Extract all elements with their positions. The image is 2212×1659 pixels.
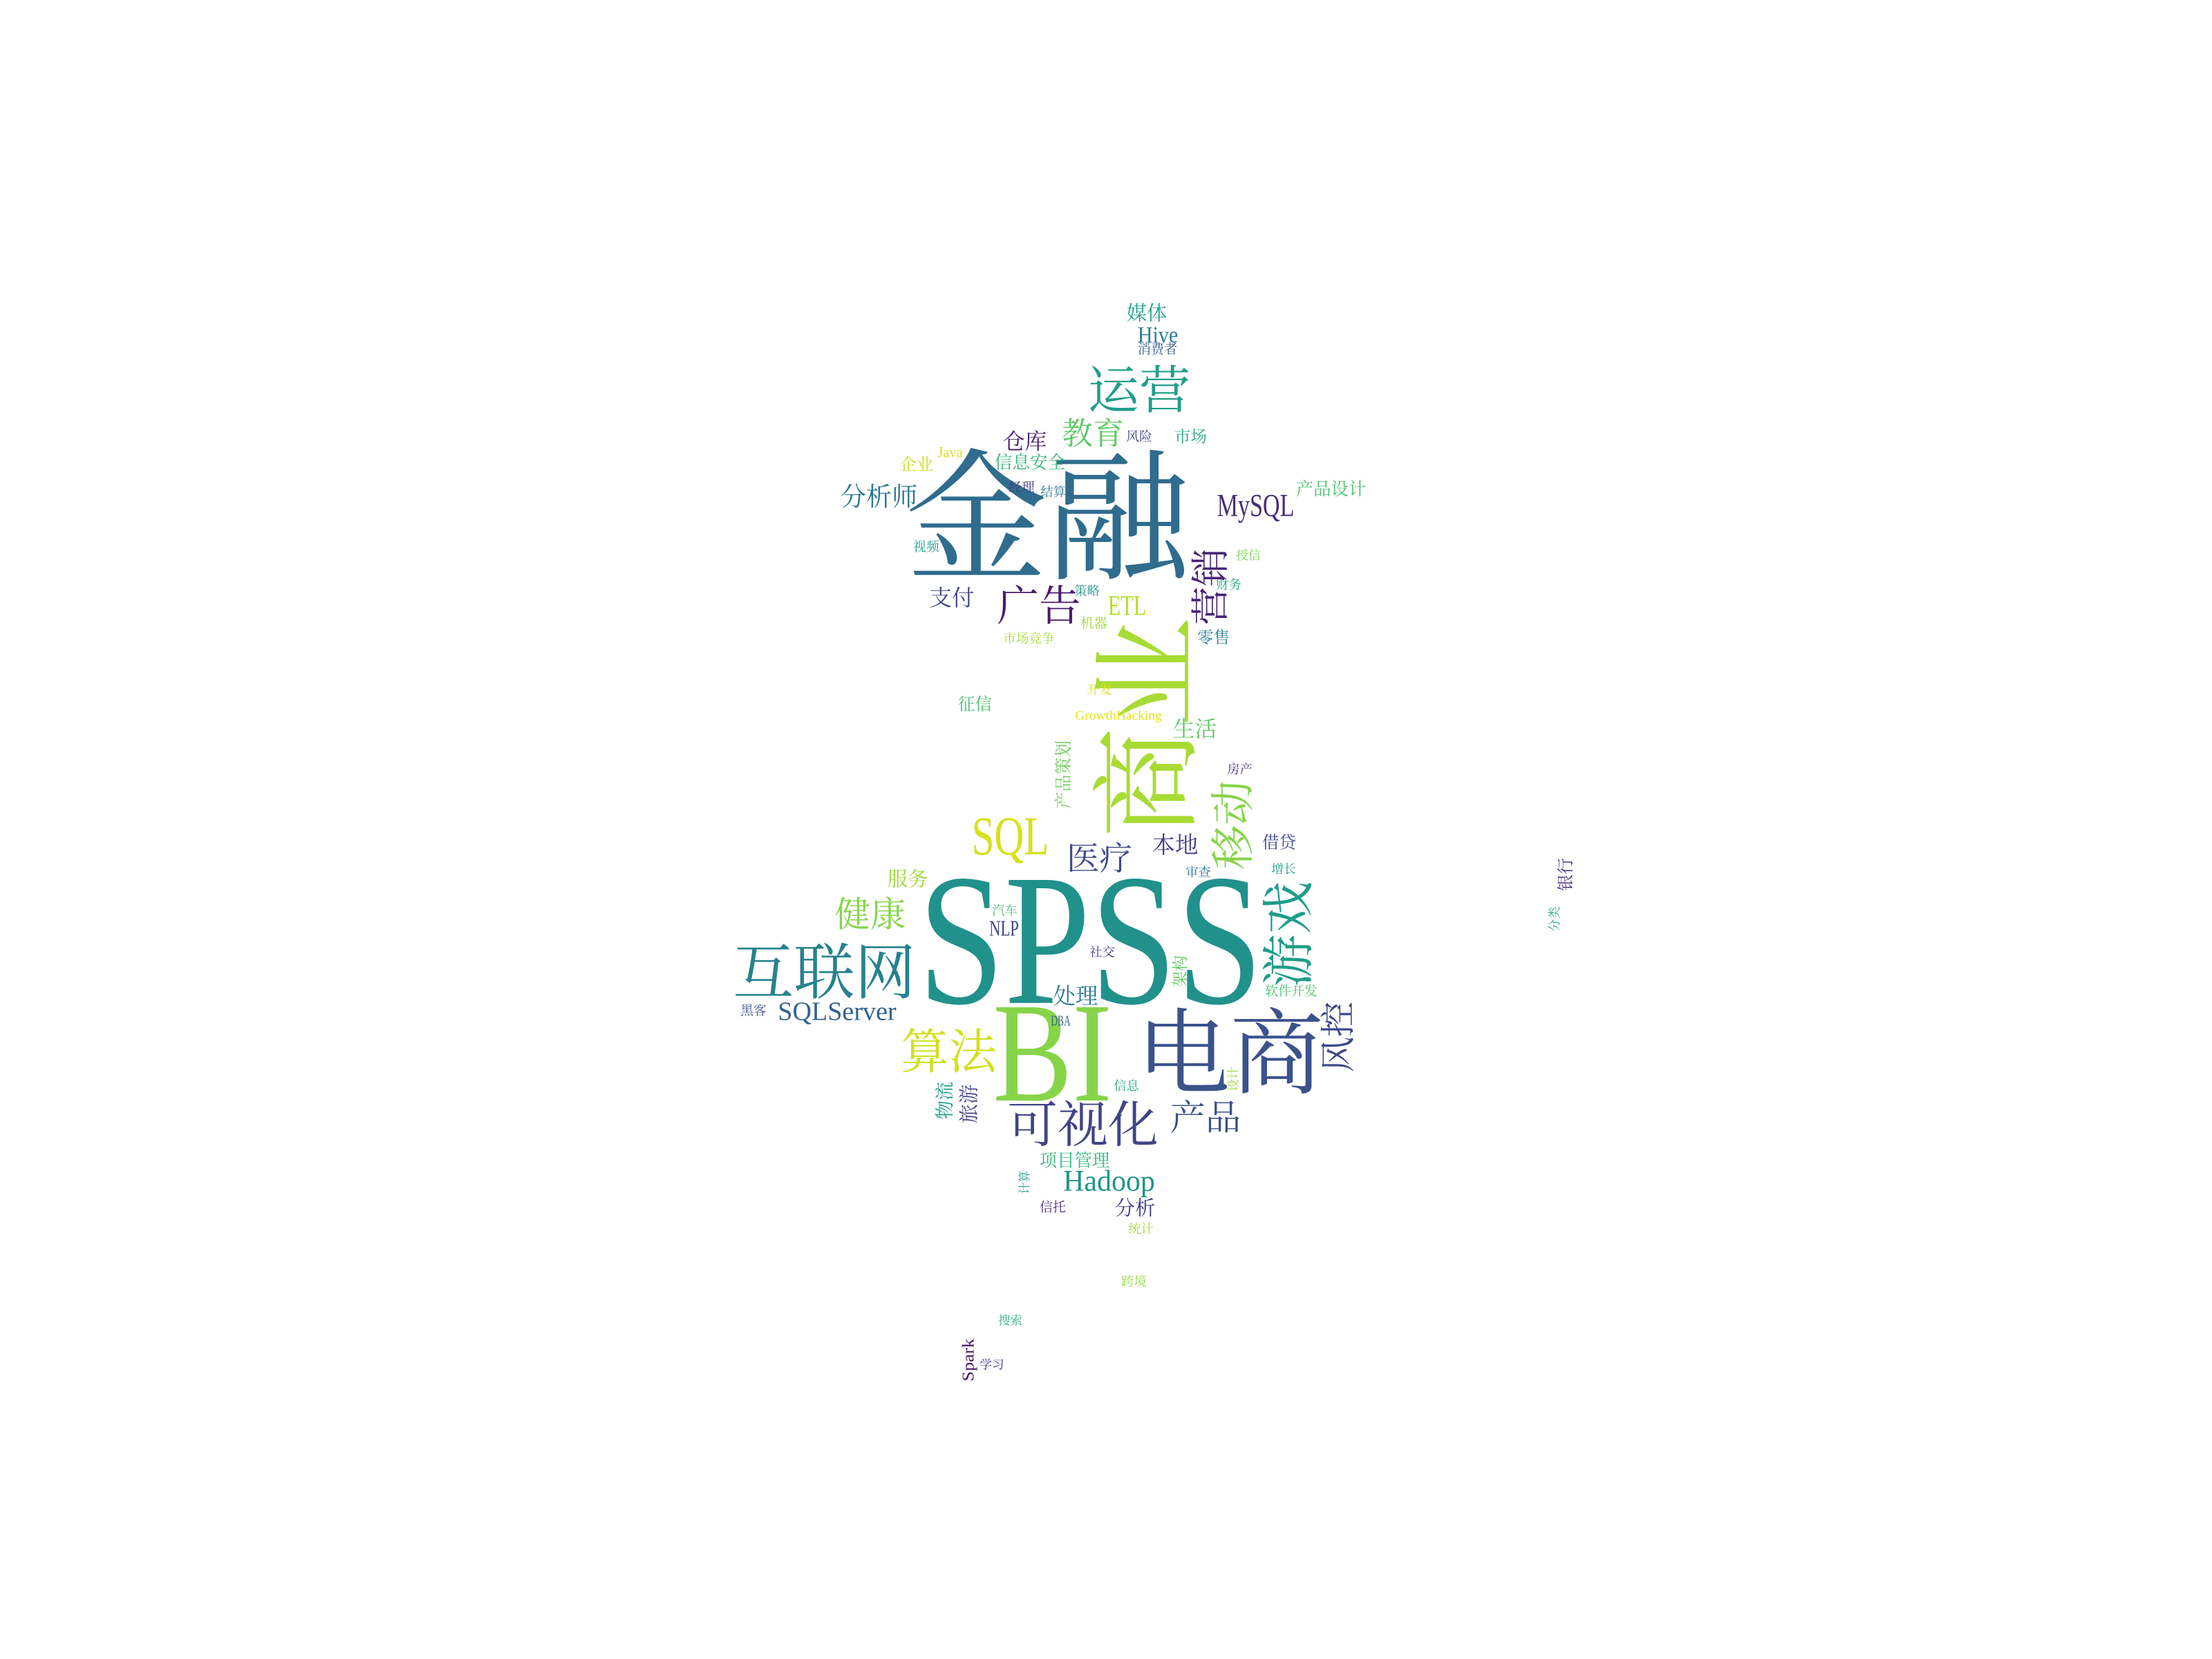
- word: 财务: 财务: [1216, 578, 1241, 592]
- word: 统计: 统计: [1128, 1222, 1154, 1236]
- word: 移动: 移动: [1209, 780, 1258, 870]
- word: 营销: 营销: [1190, 548, 1233, 625]
- word: 产品: 产品: [1170, 1098, 1241, 1138]
- word: 物流: 物流: [935, 1082, 955, 1119]
- word: 信息安全: 信息安全: [995, 452, 1065, 472]
- word: 本地: 本地: [1152, 833, 1198, 859]
- word: 项目管理: 项目管理: [1040, 1151, 1109, 1170]
- word: Hive: Hive: [1138, 322, 1178, 348]
- word: 学习: 学习: [980, 1358, 1004, 1371]
- word: 健康: 健康: [835, 895, 906, 935]
- word: SQLServer: SQLServer: [778, 997, 897, 1027]
- word: 授信: 授信: [1236, 549, 1261, 563]
- word: 信托: 信托: [1040, 1199, 1066, 1215]
- word: 商业: 商业: [1089, 617, 1210, 838]
- word: 设计: 设计: [1226, 1067, 1240, 1091]
- word: 支付: 支付: [930, 586, 974, 611]
- word: 分析师: 分析师: [841, 483, 917, 512]
- word: 风险: 风险: [1126, 429, 1152, 444]
- word: 市场竞争: 市场竞争: [1003, 632, 1055, 646]
- word: 金融: 金融: [906, 442, 1193, 599]
- word: SPSS: SPSS: [918, 836, 1263, 1044]
- word: 产品策划: 产品策划: [1054, 740, 1074, 809]
- word: 开发: 开发: [1087, 683, 1112, 697]
- word: 房产: 房产: [1227, 762, 1253, 776]
- word: 策略: 策略: [1074, 584, 1100, 598]
- word: 审查: 审查: [1185, 865, 1211, 879]
- word: 处理: 处理: [1053, 984, 1098, 1009]
- word: 机器: 机器: [1080, 616, 1107, 631]
- word: BI: BI: [993, 974, 1112, 1132]
- word: 搜索: 搜索: [998, 1314, 1022, 1327]
- word: 生活: 生活: [1173, 718, 1217, 742]
- word: 媒体: 媒体: [1127, 302, 1167, 325]
- word: Spark: Spark: [959, 1338, 977, 1381]
- word: 经理: 经理: [1009, 480, 1035, 495]
- word: 社交: 社交: [1089, 945, 1115, 959]
- word: 架构: 架构: [1172, 955, 1189, 987]
- word: Java: Java: [937, 443, 963, 460]
- word: 零售: 零售: [1197, 628, 1230, 647]
- word: DBA: DBA: [1051, 1012, 1071, 1029]
- word: 服务: 服务: [888, 868, 928, 890]
- word: 运营: 运营: [1088, 363, 1190, 420]
- word: 银行: 银行: [1557, 858, 1575, 891]
- word: 信息: 信息: [1114, 1079, 1139, 1093]
- word: 仓库: 仓库: [1003, 430, 1047, 454]
- word: 借贷: 借贷: [1262, 833, 1297, 852]
- word: 增长: 增长: [1271, 862, 1296, 876]
- word: 分析: 分析: [1115, 1197, 1155, 1219]
- word: Hadoop: Hadoop: [1063, 1165, 1155, 1198]
- word: NLP: NLP: [989, 916, 1019, 940]
- word: 汽车: 汽车: [992, 903, 1018, 917]
- word: 可视化: 可视化: [1007, 1097, 1159, 1153]
- word: 企业: 企业: [900, 456, 933, 474]
- word: 消费者: 消费者: [1138, 342, 1177, 357]
- word: 黑客: 黑客: [740, 1003, 767, 1018]
- word: 旅游: 旅游: [958, 1085, 980, 1123]
- word: 结算: 结算: [1040, 485, 1066, 499]
- word: MySQL: MySQL: [1217, 488, 1294, 524]
- word: SQL: SQL: [972, 806, 1049, 867]
- word: 市场: 市场: [1174, 428, 1207, 447]
- word: 产品设计: 产品设计: [1296, 480, 1366, 499]
- word: GrowthHacking: GrowthHacking: [1075, 709, 1162, 723]
- word: 互联网: 互联网: [733, 940, 916, 1007]
- word: 广告: 广告: [997, 583, 1081, 630]
- word: 分类: 分类: [1548, 906, 1562, 932]
- word: 教育: 教育: [1062, 417, 1124, 451]
- word: 医疗: 医疗: [1067, 841, 1132, 877]
- word: 风控: 风控: [1319, 1002, 1358, 1072]
- word: 算法: 算法: [901, 1027, 997, 1080]
- word: 征信: 征信: [958, 695, 992, 714]
- word: 视频: 视频: [913, 539, 939, 554]
- word: ETL: ETL: [1108, 590, 1146, 621]
- word: 计算: 计算: [1018, 1170, 1031, 1194]
- word: 软件开发: 软件开发: [1265, 984, 1318, 999]
- word: 游戏: 游戏: [1260, 881, 1319, 987]
- word: 电商: 电商: [1136, 1003, 1324, 1107]
- word: 跨境: 跨境: [1121, 1275, 1147, 1288]
